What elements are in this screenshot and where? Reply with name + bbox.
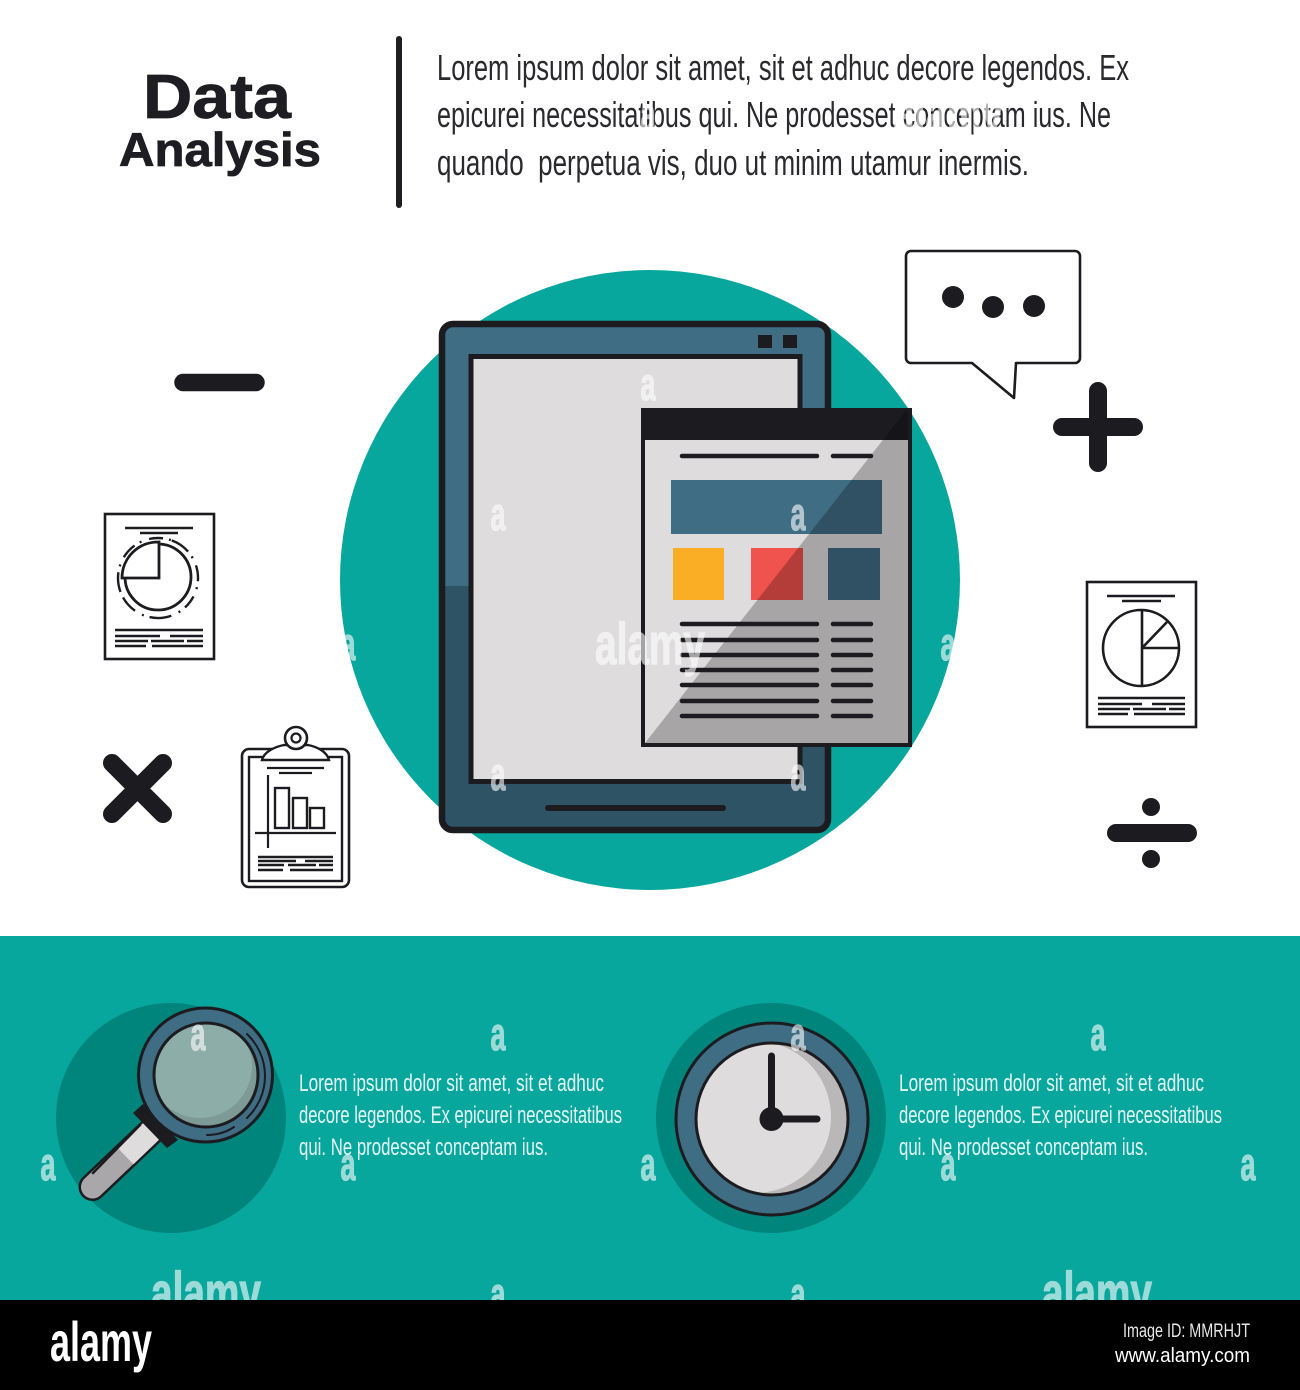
stock watermarks: a — [340, 618, 356, 670]
icon: magnifying glass — [56, 1003, 286, 1233]
header divider — [396, 36, 402, 208]
stock watermarks: a — [490, 1268, 506, 1320]
icon: document with ringed pie chart — [105, 514, 214, 659]
icon: report window — [641, 408, 911, 745]
stock watermarks: a — [1240, 1138, 1256, 1190]
stock watermarks: a — [490, 748, 506, 800]
text: clock caption: qui. Ne prodesset conceptam ius. — [899, 1134, 1148, 1161]
footer url: www.alamy.com — [1114, 1345, 1250, 1367]
teal background circle — [340, 270, 960, 890]
icon: multiply — [112, 763, 163, 814]
stock watermarks: a — [40, 1138, 56, 1190]
stock watermarks: a — [40, 618, 56, 670]
stock watermarks: a — [640, 358, 656, 410]
text: clock caption — [899, 1070, 1222, 1161]
text: magnifier caption: Lorem ipsum dolor sit amet, sit et adhuc — [299, 1070, 604, 1097]
title: Data — [143, 63, 292, 132]
stock watermarks: a — [790, 488, 806, 540]
footer logo: alamy — [50, 1310, 152, 1373]
icon: clipboard with bar chart — [242, 727, 349, 887]
text: magnifier caption: qui. Ne prodesset conceptam ius. — [299, 1134, 548, 1161]
stock watermarks: a — [1090, 1008, 1106, 1060]
title — [119, 63, 321, 176]
intro text block: quando perpetua vis, duo ut minim utamur inermis. — [437, 142, 1029, 183]
footer image id: Image ID: MMRHJT — [1123, 1321, 1250, 1342]
stock watermarks: a — [490, 1008, 506, 1060]
stock watermarks: a — [490, 488, 506, 540]
icon: speech bubble — [906, 251, 1080, 398]
icon: minus — [183, 374, 256, 391]
intro text block — [437, 47, 1129, 183]
stock watermarks: a — [640, 1138, 656, 1190]
stock watermarks: a — [790, 748, 806, 800]
stock watermarks: a — [190, 1008, 206, 1060]
stock watermarks: a — [640, 88, 656, 140]
text: magnifier caption: decore legendos. Ex epicurei necessitatibus — [299, 1102, 622, 1129]
stock watermarks: a — [940, 618, 956, 670]
icon: divide — [1107, 798, 1197, 868]
stock watermarks: alamy — [595, 612, 705, 677]
stock watermarks: a — [790, 1268, 806, 1320]
text: magnifier caption — [299, 1070, 622, 1161]
stock watermarks: a — [940, 1138, 956, 1190]
icon: clock — [656, 1003, 886, 1233]
stock watermarks: alamy — [151, 1261, 261, 1326]
icon: tablet — [442, 324, 828, 830]
title: Analysis — [119, 123, 321, 176]
icon: document with pie chart — [1087, 582, 1196, 727]
stock watermarks: a — [790, 1008, 806, 1060]
stock watermarks: alamy — [1042, 1261, 1152, 1326]
stock watermarks: alamy — [893, 81, 1003, 146]
icon: plus — [1062, 391, 1134, 463]
panel: teal info band — [0, 936, 1300, 1300]
footer bar — [0, 1300, 1300, 1390]
stock watermarks: a — [340, 1138, 356, 1190]
